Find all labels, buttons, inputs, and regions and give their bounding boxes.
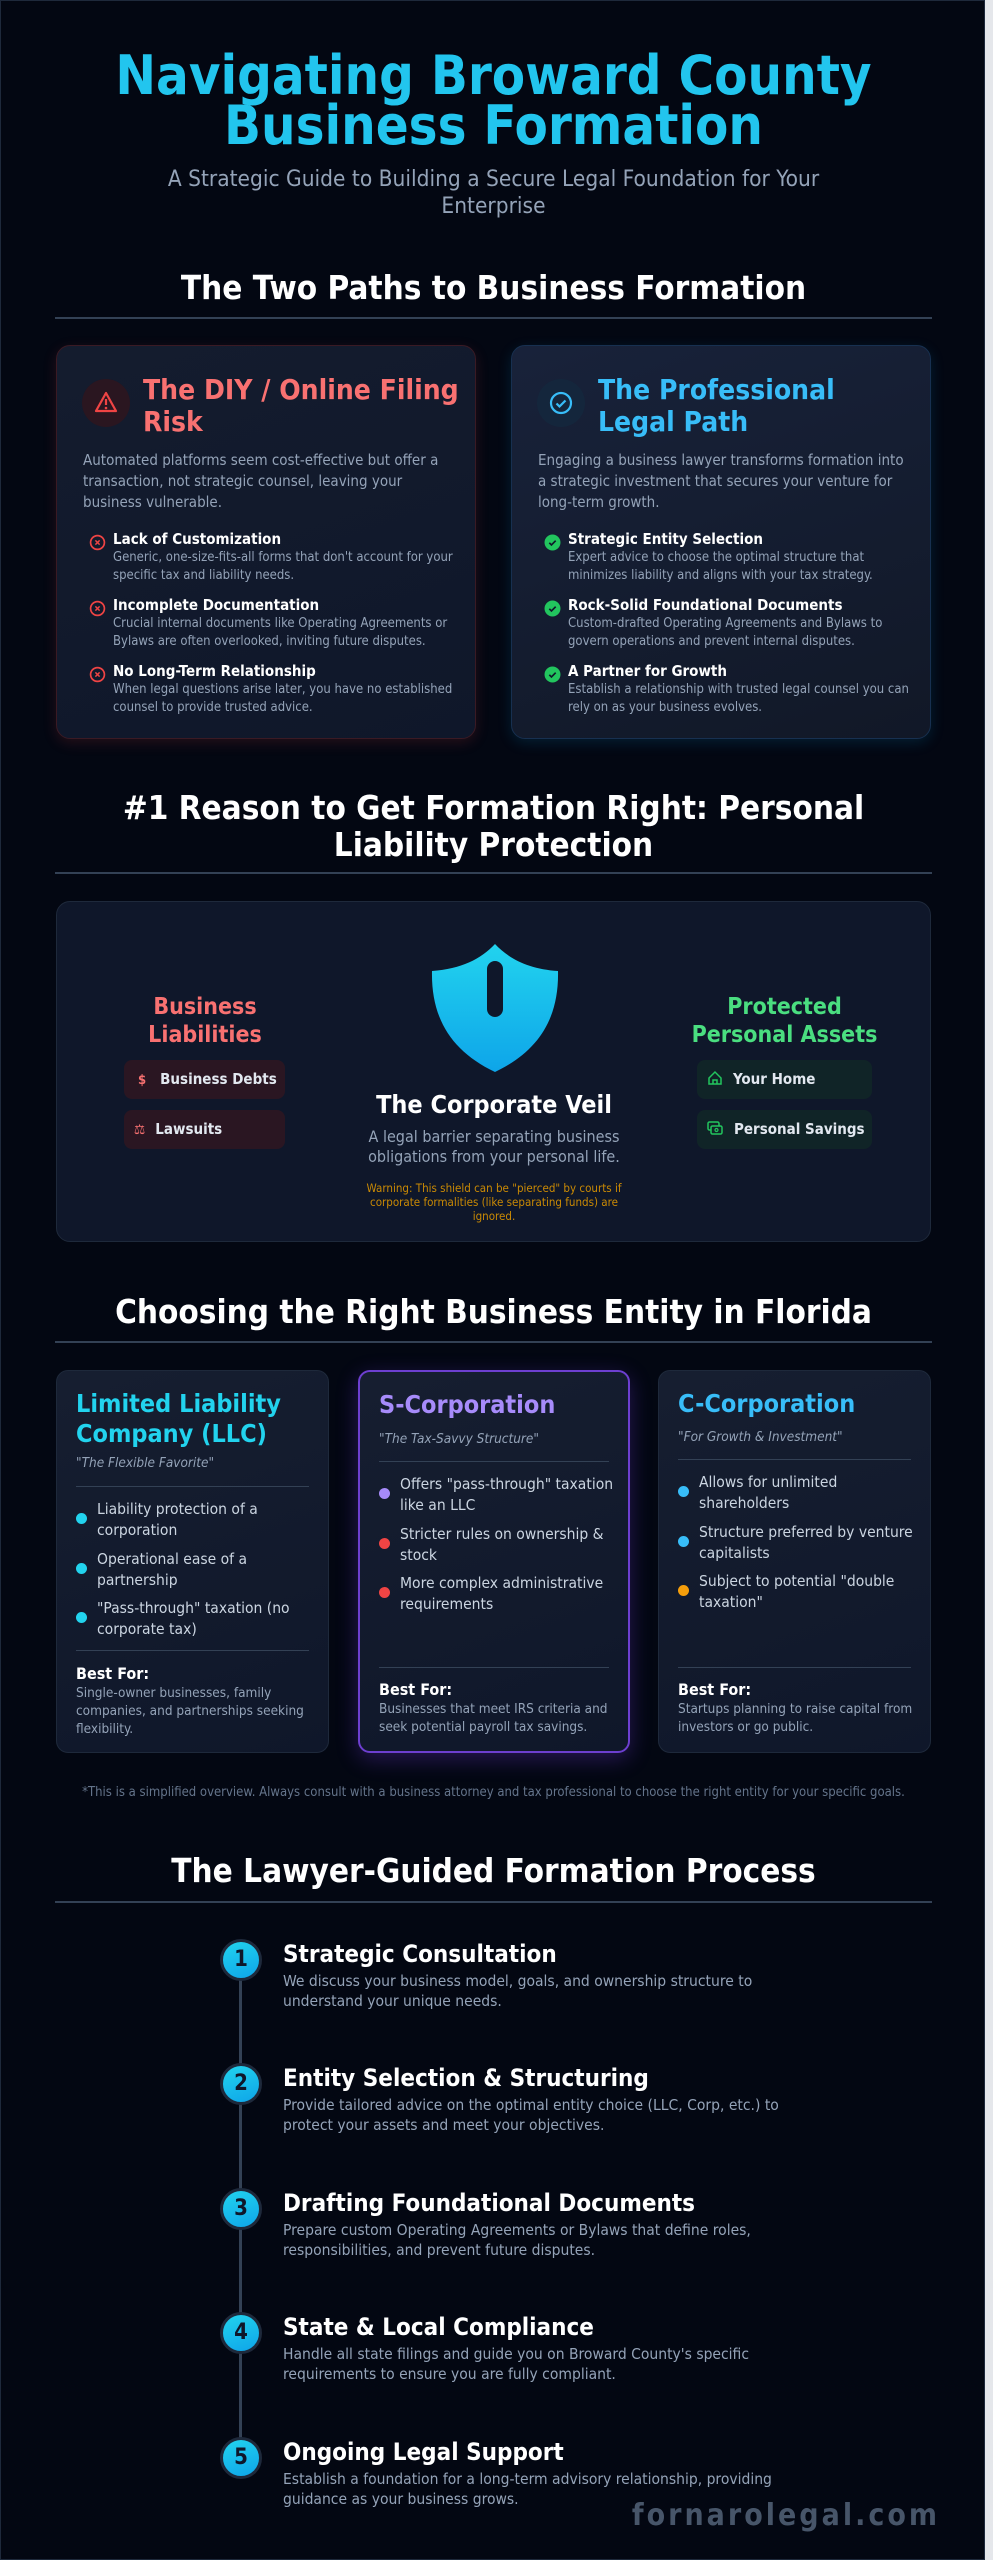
panel: S-Corp: More complex administrative requirements	[400, 1574, 603, 1613]
icon: shield	[432, 944, 558, 1072]
text: Entity Selection & Structuring	[283, 2064, 649, 2092]
step 1: 1	[234, 1947, 248, 1972]
card title	[598, 373, 835, 438]
step 1: We discuss your business model, goals, and ownership structure to understand your unique needs.	[283, 1972, 752, 2010]
panel: S-Corp: Businesses that meet IRS criteria and seek potential payroll tax savings.	[379, 1701, 608, 1735]
pill: your home	[697, 1060, 872, 1099]
protected assets column	[692, 994, 877, 1149]
panel: C-Corp: "For Growth & Investment"	[678, 1429, 843, 1445]
risk list: No Long-Term Relationship	[113, 662, 316, 680]
pill: personal savings: Personal Savings	[734, 1120, 865, 1138]
pill: business debts: $ Business Debts	[138, 1070, 277, 1088]
panel: S-Corp: Best For:	[379, 1680, 452, 1699]
panel: LLC: Best For:	[76, 1664, 149, 1683]
step 5	[220, 2437, 772, 2508]
protected assets column: Protected	[727, 994, 842, 1020]
step 2	[220, 2063, 779, 2134]
panel: LLC: "The Flexible Favorite"	[76, 1455, 214, 1471]
pill: your home: Your Home	[733, 1070, 815, 1088]
business liabilities column	[124, 994, 285, 1149]
panel: corporate veil	[56, 901, 931, 1242]
panel: C-Corp: Structure preferred by venture capitalists	[699, 1523, 913, 1562]
benefit list: Rock-Solid Foundational Documents	[568, 596, 842, 614]
benefit list: Expert advice to choose the optimal structure that minimizes liability and aligns with your tax strategy.	[568, 550, 873, 583]
risk list: Incomplete Documentation	[113, 596, 319, 614]
step 4: Handle all state filings and guide you on Broward County's specific requirements to ensure you are fully compliant.	[283, 2345, 749, 2383]
timeline	[239, 1980, 242, 2438]
risk list: Lack of Customization	[113, 530, 281, 548]
benefit list: Custom-drafted Operating Agreements and Bylaws to govern operations and prevent internal disputes.	[568, 616, 882, 649]
pill: lawsuits	[124, 1110, 285, 1149]
card title	[143, 373, 459, 438]
step 4	[220, 2312, 749, 2383]
icon: warning	[82, 379, 130, 427]
panel: C-Corp: C-Corporation	[678, 1389, 855, 1418]
step 2: 2	[234, 2071, 248, 2096]
title	[115, 44, 872, 157]
text: Drafting Foundational Documents	[283, 2189, 695, 2217]
heading: liability protection: Liability Protection	[334, 825, 653, 864]
protected assets column: Personal Assets	[692, 1022, 877, 1048]
benefit list	[544, 530, 909, 715]
panel: C-Corp	[658, 1370, 931, 1753]
benefit list: Establish a relationship with trusted legal counsel you can rely on as your business evolves.	[568, 682, 909, 715]
panel: C-Corp: Subject to potential "double taxation"	[699, 1572, 894, 1611]
step 5: 5	[234, 2445, 248, 2470]
panel: S-Corp: Offers "pass-through" taxation like an LLC	[400, 1475, 613, 1514]
business liabilities column: Liabilities	[148, 1022, 262, 1048]
pill: personal savings	[697, 1110, 872, 1149]
center text: corporate veil: The Corporate Veil	[376, 1090, 612, 1119]
panel: LLC: Single-owner businesses, family companies, and partnerships seeking flexibility.	[76, 1685, 304, 1737]
heading: liability protection: #1 Reason to Get Formation Right: Personal	[123, 788, 864, 827]
panel: S-Corp: Stricter rules on ownership & stock	[400, 1525, 604, 1564]
intro text: Automated platforms seem cost-effective but offer a transaction, not strategic counsel, leaving your business vulnerable.	[83, 451, 438, 511]
pill: lawsuits: ⚖ Lawsuits	[134, 1120, 222, 1138]
intro text: Engaging a business lawyer transforms formation into a strategic investment that secures your venture for long-term growth.	[538, 451, 904, 511]
text: Ongoing Legal Support	[283, 2438, 564, 2466]
panel: S-Corp: "The Tax-Savvy Structure"	[379, 1431, 539, 1447]
center text: corporate veil	[366, 1090, 622, 1223]
subtitle: A Strategic Guide to Building a Secure Legal Foundation for Your Enterprise	[168, 166, 819, 219]
panel: LLC: Limited Liability	[76, 1389, 281, 1418]
pill: business debts	[124, 1060, 285, 1099]
benefit list: A Partner for Growth	[568, 662, 727, 680]
footer: brand: fornarolegal.com	[632, 2498, 940, 2533]
panel: professional path	[511, 345, 931, 739]
risk list: Crucial internal documents like Operating Agreements or Bylaws are often overlooked, inviting future disputes.	[113, 616, 447, 649]
step 1	[220, 1939, 752, 2010]
panel: LLC: Operational ease of a partnership	[97, 1550, 247, 1589]
step 3	[220, 2188, 751, 2259]
step 3: Prepare custom Operating Agreements or Bylaws that define roles, responsibilities, and prevent future disputes.	[283, 2221, 751, 2259]
step 2: Provide tailored advice on the optimal entity choice (LLC, Corp, etc.) to protect your assets and meet your objectives.	[283, 2096, 779, 2134]
step 5: Establish a foundation for a long-term advisory relationship, providing guidance as your business grows.	[283, 2470, 772, 2508]
step 4: 4	[234, 2320, 248, 2345]
center text: corporate veil: A legal barrier separating business obligations from your personal life.	[368, 1127, 620, 1166]
text: Strategic Consultation	[283, 1940, 557, 1968]
card title: The Professional	[598, 373, 835, 406]
panel: LLC: Company (LLC)	[76, 1419, 267, 1448]
card title: The DIY / Online Filing	[143, 373, 459, 406]
panel: LLC: Liability protection of a corporation	[97, 1500, 258, 1539]
risk list	[90, 530, 453, 715]
step 3: 3	[234, 2196, 248, 2221]
icon: check badge	[537, 379, 585, 427]
heading: liability protection	[123, 788, 864, 864]
panel: LLC: "Pass-through" taxation (no corporate tax)	[97, 1599, 290, 1638]
panel: S-Corp	[358, 1370, 630, 1753]
text: State & Local Compliance	[283, 2313, 594, 2341]
card title: Risk	[143, 405, 203, 438]
card title: Legal Path	[598, 405, 748, 438]
center text: corporate veil: Warning: This shield can be "pierced" by courts if corporate formalities (like separating funds) are ignored.	[367, 1181, 621, 1223]
panel: LLC	[56, 1370, 329, 1753]
benefit list: Strategic Entity Selection	[568, 530, 763, 548]
panel: DIY risk	[56, 345, 476, 739]
footnote: *This is a simplified overview. Always consult with a business attorney and tax professional to choose the right entity for your specific goals.	[82, 1785, 905, 1800]
title: Navigating Broward County	[115, 44, 872, 107]
heading: process: The Lawyer-Guided Formation Process	[171, 1851, 816, 1890]
heading: choosing entity: Choosing the Right Business Entity in Florida	[115, 1292, 872, 1331]
heading: two paths: The Two Paths to Business Formation	[181, 268, 806, 307]
panel: C-Corp: Allows for unlimited shareholders	[699, 1473, 837, 1512]
panel: S-Corp: S-Corporation	[379, 1390, 555, 1419]
risk list: Generic, one-size-fits-all forms that don't account for your specific tax and liability needs.	[113, 550, 453, 583]
panel: C-Corp: Best For:	[678, 1680, 751, 1699]
risk list: When legal questions arise later, you have no established counsel to provide trusted advice.	[113, 682, 452, 715]
title: Business Formation	[224, 94, 763, 157]
business liabilities column: Business	[153, 994, 257, 1020]
panel: C-Corp: Startups planning to raise capital from investors or go public.	[678, 1701, 912, 1735]
